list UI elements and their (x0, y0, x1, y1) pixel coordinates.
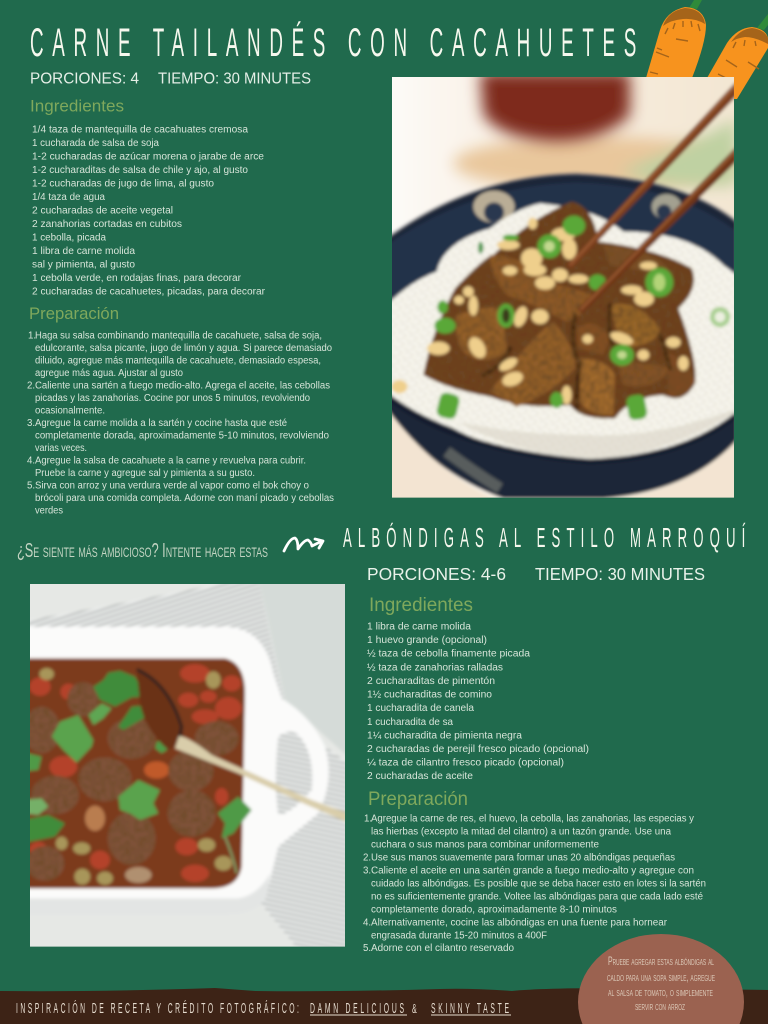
ingredient list, recipe 1: 1 cebolla, picada (32, 232, 107, 244)
ingredient list, recipe 2: 1 libra de carne molida (367, 622, 472, 632)
preparation steps, recipe 2: 4. (363, 918, 371, 928)
preparation steps, recipe 1: Sirva con arroz y una verdura verde al vapor como el bok choy o (35, 480, 309, 492)
servings and time, recipe 2: TIEMPO: 30 MINUTES (535, 564, 705, 584)
preparation steps, recipe 1 (27, 330, 334, 516)
preparation steps, recipe 2: 3. (363, 866, 371, 876)
preparation steps, recipe 2: 2. (363, 852, 371, 864)
preparation steps, recipe 2: cuchara o sus manos para combinar uniformemente (371, 840, 599, 850)
heading: preparación, recipe 2: Preparación (368, 789, 468, 810)
icon: carrot right (707, 14, 768, 99)
ingredient list, recipe 2: 1 huevo grande (opcional) (367, 635, 487, 646)
ingredient list, recipe 1 (32, 124, 266, 298)
preparation steps, recipe 1: ocasionalmente. (35, 406, 105, 416)
ingredient list, recipe 2: 2 cucharadas de perejil fresco picado (opcional) (367, 744, 589, 755)
ingredient list, recipe 1: 1 libra de carne molida (32, 246, 136, 257)
preparation steps, recipe 2: engrasada durante 15-20 minutos a 400F (371, 930, 547, 942)
callout: serving suggestion: servir con arroz (635, 1001, 685, 1013)
ingredient list, recipe 2: 1¼ cucharadita de pimienta negra (367, 730, 523, 742)
servings and time, recipe 1 (30, 70, 311, 88)
preparation steps, recipe 2: no es suficientemente grande. Voltee las albóndigas para que cada lado esté (371, 892, 703, 902)
green onions (434, 216, 673, 421)
preparation steps, recipe 2: Adorne con el cilantro reservado (371, 943, 514, 954)
preparation steps, recipe 1: edulcorante, salsa picante, jugo de limón y agua. Si parece demasiado (35, 343, 332, 354)
preparation steps, recipe 1: agregue más agua. Ajustar al gusto (35, 368, 183, 379)
arrow: scribble pointing to second recipe (284, 538, 323, 551)
preparation steps, recipe 1: Caliente una sartén a fuego medio-alto. Agrega el aceite, las cebollas (35, 380, 330, 392)
bowl (387, 174, 737, 498)
preparation steps, recipe 2: cuidado las albóndigas. Es posible que se deba hacer esto en lotes si la sartén (371, 878, 706, 890)
preparation steps, recipe 1: 1. (28, 330, 36, 342)
sauce (22, 658, 245, 888)
meatballs (23, 682, 239, 881)
footer credits: & (412, 1003, 417, 1017)
ingredient list, recipe 1: 1/4 taza de mantequilla de cacahuates cremosa (32, 124, 249, 136)
cilantro (22, 671, 252, 843)
ingredient list, recipe 1: 1 cucharada de salsa de soja (32, 138, 160, 149)
ingredient list, recipe 1: 2 cucharadas de aceite vegetal (32, 206, 173, 216)
preparation steps, recipe 2: Agregue la carne de res, el huevo, la cebolla, las zanahorias, las especias y (371, 814, 694, 824)
beef (423, 202, 695, 418)
preparation steps, recipe 2: las hierbas (excepto la mitad del cilantro) a un tazón grande. Use una (371, 826, 672, 838)
ingredient list, recipe 2: ½ taza de zanahorias ralladas (367, 662, 503, 674)
cloth (30, 584, 282, 695)
ingredient list, recipe 1: 1/4 taza de agua (32, 192, 106, 203)
peanuts (391, 217, 689, 404)
heading: preparación, recipe 1: Preparación (29, 304, 119, 323)
ingredient list, recipe 1: 1-2 cucharadas de azúcar morena o jarabe de arce (32, 152, 264, 162)
ingredient list, recipe 1: 1-2 cucharaditas de salsa de chile y ajo, al gusto (32, 165, 248, 176)
preparation steps, recipe 1: verdes (35, 506, 63, 516)
preparation steps, recipe 2: Caliente el aceite en una sartén grande a fuego medio-alto y agregue con (371, 866, 694, 876)
ingredient list, recipe 2 (367, 622, 589, 782)
servings and time, recipe 2: PORCIONES: 4-6 (367, 564, 506, 584)
preparation steps, recipe 2: 1. (364, 814, 372, 824)
ingredient list, recipe 2: 1½ cucharaditas de comino (367, 690, 492, 700)
ingredient list, recipe 2: 1 cucharadita de sa (367, 717, 454, 728)
preparation steps, recipe 1: Agregue la carne molida a la sartén y cocine hasta que esté (35, 418, 287, 429)
ingredient list, recipe 2: ¼ taza de cilantro fresco picado (opcional) (367, 758, 564, 768)
preparation steps, recipe 1: picadas y las zanahorias. Cocine por unos 5 minutos, revolviendo (35, 393, 310, 404)
dish (22, 627, 329, 915)
footer credits: DAMN DELICIOUS (310, 1001, 404, 1017)
preparation steps, recipe 1: 4. (27, 456, 35, 466)
heading: ingredientes, recipe 1: Ingredientes (30, 96, 124, 116)
preparation steps, recipe 1: varias veces. (35, 443, 87, 454)
preparation steps, recipe 1: diluido, agregue más mantequilla de cacahuete, demasiado espesa, (35, 356, 321, 366)
preparation steps, recipe 1: Haga su salsa combinando mantequilla de cacahuete, salsa de soja, (35, 330, 322, 342)
footer credits (16, 1000, 511, 1017)
ingredient list, recipe 2: ½ taza de cebolla finamente picada (367, 648, 531, 660)
ingredient list, recipe 1: 2 cucharadas de cacahuetes, picadas, para decorar (32, 286, 266, 298)
heading: ingredientes, recipe 2: Ingredientes (369, 595, 473, 616)
preparation steps, recipe 1: 2. (27, 380, 35, 392)
ingredient list, recipe 1: 2 zanahorias cortadas en cubitos (32, 219, 182, 230)
title: albóndigas: ALBÓNDIGAS AL ESTILO MARROQUÍ (343, 521, 746, 553)
servings and time, recipe 1: TIEMPO: 30 MINUTES (158, 70, 311, 88)
footer credits: INSPIRACIÓN DE RECETA Y CRÉDITO FOTOGRÁFICO: (16, 1000, 299, 1017)
tagline: more ambitious: ¿Se siente más ambicioso? Intente hacer estas (17, 540, 268, 562)
ingredient list, recipe 2: 1 cucharadita de canela (367, 703, 475, 714)
servings and time, recipe 2 (367, 564, 705, 584)
preparation steps, recipe 2: Use sus manos suavemente para formar unas 20 albóndigas pequeñas (371, 852, 675, 864)
preparation steps, recipe 1: Pruebe la carne y agregue sal y pimienta a su gusto. (35, 468, 255, 479)
icon: carrot left (646, 0, 706, 78)
ingredient list, recipe 1: sal y pimienta, al gusto (32, 260, 135, 270)
footer band (0, 988, 768, 1024)
preparation steps, recipe 1: Agregue la salsa de cacahuete a la carne y revuelva para cubrir. (35, 456, 306, 466)
callout: serving suggestion: al salsa de tomato, o simplemente (608, 987, 713, 999)
chopsticks (567, 81, 737, 269)
servings and time, recipe 1: PORCIONES: 4 (30, 70, 139, 88)
ingredient list, recipe 1: 1 cebolla verde, en rodajas finas, para decorar (32, 273, 242, 284)
preparation steps, recipe 2: 5. (363, 943, 371, 954)
photo: thai peanut beef over rice (387, 72, 740, 505)
photo: moroccan meatballs in white dish (22, 577, 355, 953)
preparation steps, recipe 2 (363, 814, 706, 954)
preparation steps, recipe 1: 3. (27, 418, 35, 429)
preparation steps, recipe 2: Alternativamente, cocine las albóndigas en una fuente para hornear (371, 918, 668, 928)
ingredient list, recipe 1: 1-2 cucharadas de jugo de lima, al gusto (32, 178, 214, 190)
preparation steps, recipe 1: completamente dorada, aproximadamente 5-10 minutos, revolviendo (35, 430, 329, 442)
footer credits: SKINNY TASTE (431, 1001, 509, 1017)
title: carne tailandés: CARNE TAILANDÉS CON CACAHUETES (30, 20, 636, 65)
ingredient list, recipe 2: 2 cucharadas de aceite (367, 771, 473, 782)
preparation steps, recipe 1: 5. (27, 480, 35, 492)
preparation steps, recipe 1: brócoli para una comida completa. Adorne con maní picado y cebollas (35, 493, 334, 504)
spoon (136, 672, 180, 752)
ingredient list, recipe 2: 2 cucharaditas de pimentón (367, 676, 495, 687)
callout: serving suggestion (578, 934, 744, 1024)
preparation steps, recipe 2: completamente dorado, aproximadamente 8-10 minutos (371, 904, 617, 916)
